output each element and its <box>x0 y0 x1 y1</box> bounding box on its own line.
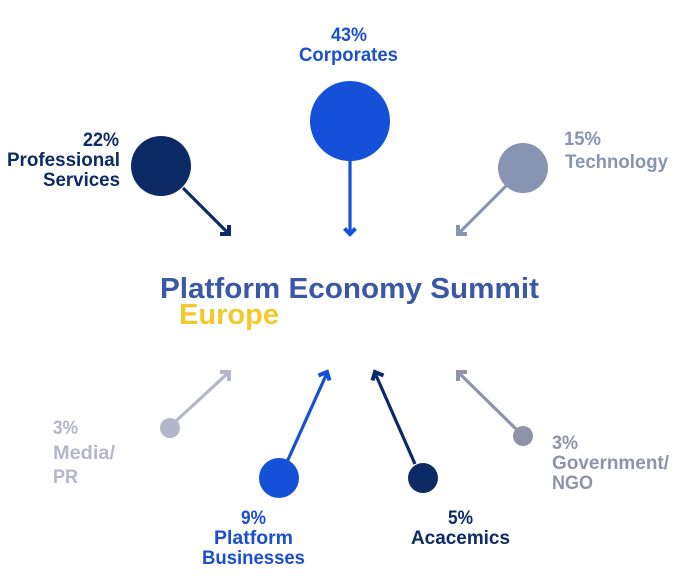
label: 9% Platform Businesses: Platform <box>214 527 293 549</box>
label: 3% Media/ PR: 3% <box>53 417 78 439</box>
label: 43% Corporates: Corporates <box>299 44 398 66</box>
arrow: corporates <box>344 160 356 234</box>
segment: media / PR <box>53 372 229 488</box>
segment: professional services <box>7 129 229 234</box>
label: 15% Technology <box>564 128 668 173</box>
label: 15% Technology: Technology <box>565 151 668 173</box>
arrow: professional services <box>183 188 229 234</box>
arrow: media / PR <box>176 372 229 421</box>
arrow: platform businesses <box>287 372 330 462</box>
circle: platform businesses <box>259 458 299 498</box>
label: 3% Media/ PR <box>53 417 116 488</box>
label: 43% Corporates: 43% <box>331 24 367 46</box>
logo text: Europe: Europe <box>179 299 279 331</box>
circle: corporates <box>310 81 390 161</box>
label: 9% Platform Businesses: 9% <box>241 507 266 529</box>
label: 22% Professional Services <box>7 129 120 191</box>
segment: government / NGO <box>458 372 670 494</box>
logo text: Platform Economy Summit: Platform Economy Summit <box>160 273 539 305</box>
label: 3% Government/ NGO: Government/ <box>552 452 670 474</box>
label: 3% Government/ NGO: 3% <box>552 432 578 454</box>
circle: technology <box>498 143 548 193</box>
arrow: government / NGO <box>458 372 516 429</box>
label: 3% Government/ NGO <box>552 432 670 494</box>
circle: academics <box>408 463 438 493</box>
label: 43% Corporates <box>299 24 398 66</box>
label: 5% Acacemics <box>411 507 510 549</box>
label: 15% Technology: 15% <box>564 128 601 150</box>
circle: government / NGO <box>513 426 533 446</box>
label: 3% Media/ PR: Media/ <box>53 442 116 464</box>
label: 9% Platform Businesses <box>202 507 305 569</box>
label: 22% Professional Services: Professional <box>7 149 120 171</box>
segment: technology <box>458 128 668 234</box>
label: 22% Professional Services: 22% <box>83 129 119 151</box>
arrow: technology <box>458 186 506 234</box>
arrow: academics <box>372 372 415 464</box>
segment: academics <box>372 372 510 549</box>
label: 5% Acacemics: 5% <box>448 507 473 529</box>
segment: platform businesses <box>202 372 330 569</box>
segment: corporates <box>299 24 398 234</box>
label: 9% Platform Businesses: Businesses <box>202 547 305 569</box>
label: 3% Media/ PR: PR <box>53 466 78 488</box>
label: 3% Government/ NGO: NGO <box>552 472 593 494</box>
label: 22% Professional Services: Services <box>43 169 120 191</box>
logo: Platform Economy Summit Europe <box>160 273 539 331</box>
circle: professional services <box>131 136 191 196</box>
circle: media / PR <box>160 418 180 438</box>
label: 5% Acacemics: Acacemics <box>411 527 510 549</box>
